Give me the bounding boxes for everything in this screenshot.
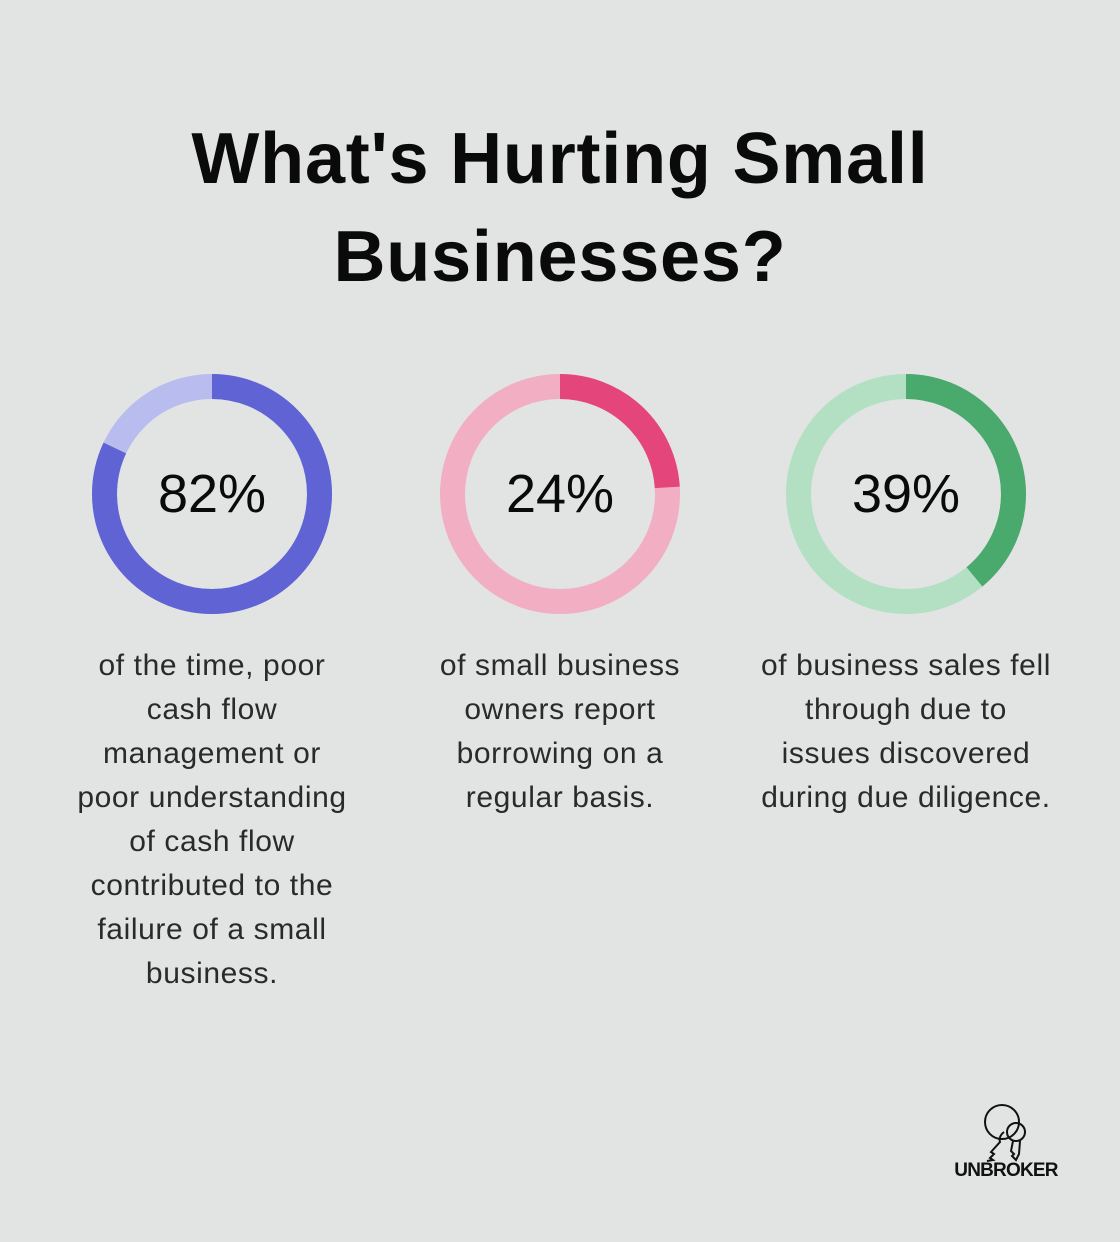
caption: 82%: failure of a small (97, 913, 327, 946)
donut: 24% (452, 386, 668, 602)
donut: 39%: 39% (852, 464, 960, 524)
caption: 82%: of cash flow (129, 825, 295, 858)
caption: 82%: business. (146, 957, 278, 990)
caption: 82%: of the time, poor (98, 649, 325, 682)
caption: 24%: borrowing on a (457, 737, 663, 770)
caption: 82%: management or (103, 737, 321, 770)
caption: 24%: owners report (464, 693, 656, 726)
donut: 24%: 24% (506, 464, 614, 524)
caption: 24% (440, 649, 680, 814)
caption: 39%: during due diligence. (761, 781, 1051, 814)
caption: 24%: regular basis. (466, 781, 654, 814)
donut: 39% (798, 386, 1014, 602)
caption: 24%: of small business (440, 649, 680, 682)
title: Businesses? (334, 217, 786, 297)
caption: 82%: cash flow (147, 693, 277, 726)
caption: 39% (761, 649, 1051, 814)
caption: 39%: of business sales fell (761, 649, 1051, 682)
donut: 82%: 82% (158, 464, 266, 524)
logo text: UNBROKER (954, 1160, 1058, 1181)
icon: keys (984, 1104, 1026, 1162)
caption: 82%: contributed to the (91, 869, 333, 902)
caption: 82% (77, 649, 347, 990)
donut: 82% (104, 386, 320, 602)
title: What's Hurting Small (191, 119, 929, 199)
caption: 82%: poor understanding (77, 781, 347, 814)
title (191, 119, 929, 297)
caption: 39%: issues discovered (782, 737, 1030, 770)
logo: unbroker (954, 1104, 1058, 1181)
caption: 39%: through due to (805, 693, 1007, 726)
donut charts (92, 374, 1026, 614)
